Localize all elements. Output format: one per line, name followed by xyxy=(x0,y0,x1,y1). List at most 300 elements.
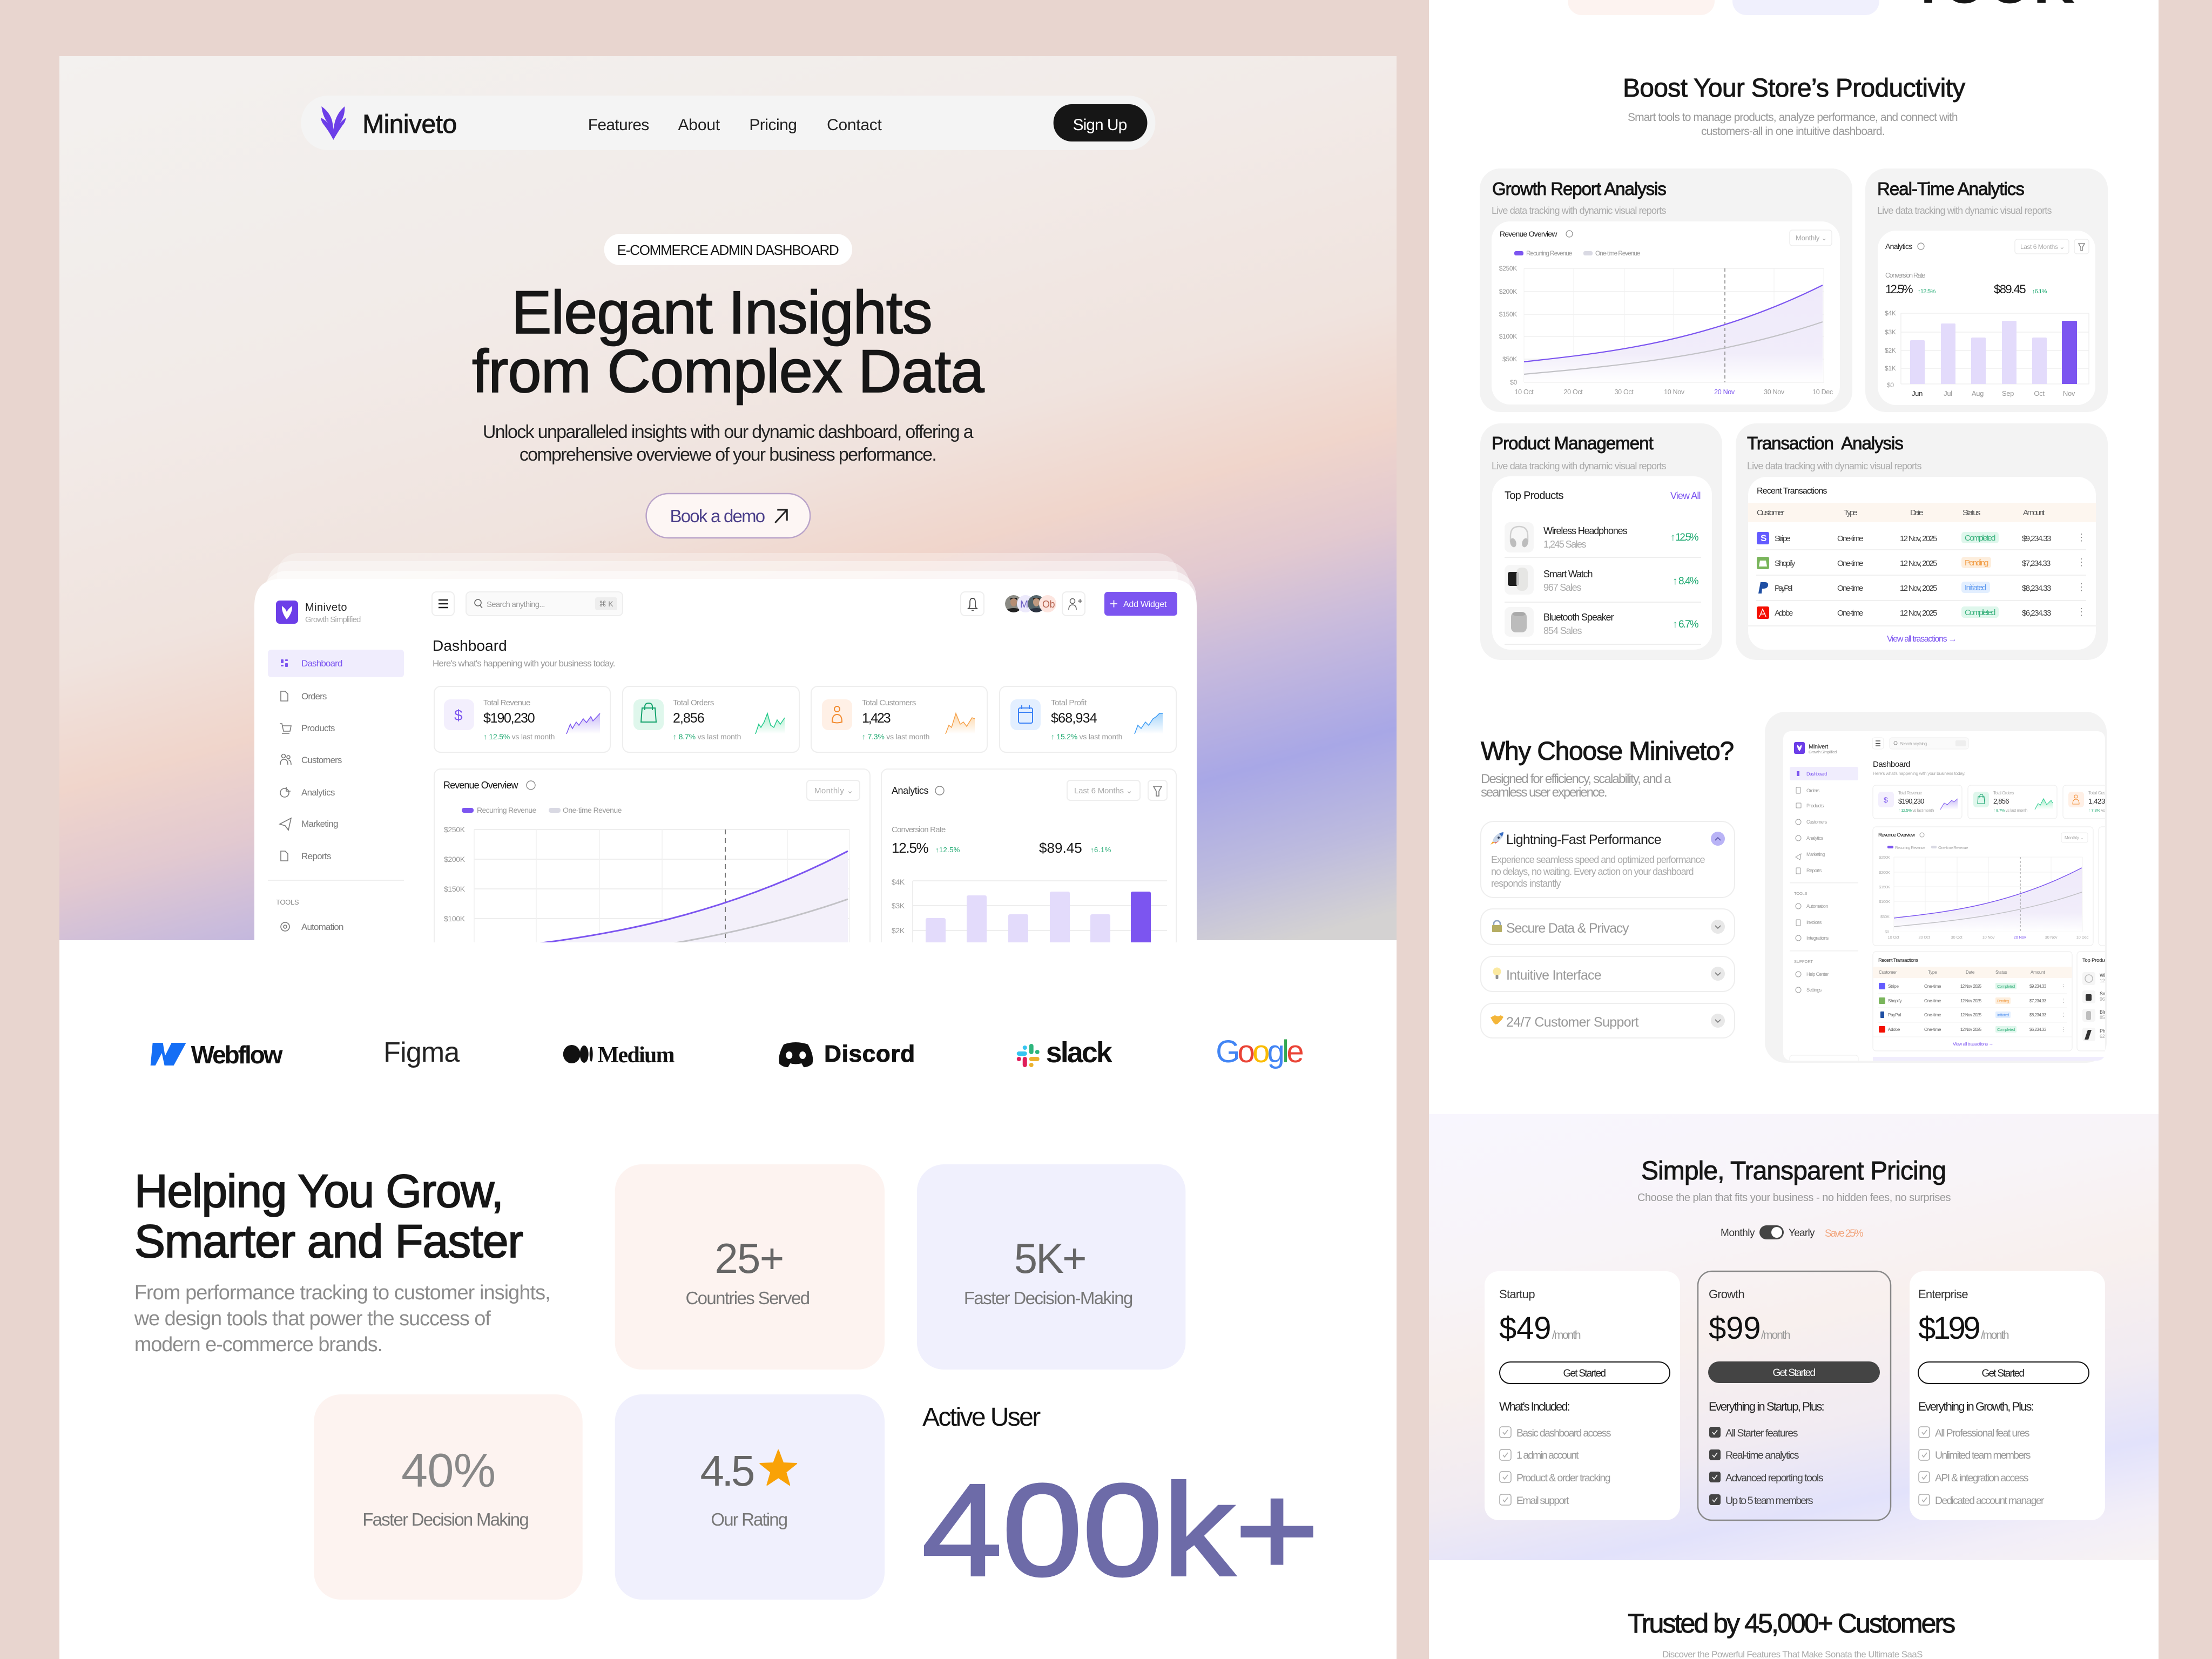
mini heading: Here's what's happening with your business today. xyxy=(1873,771,1965,776)
panel: real-time analytics: 12.5% xyxy=(1885,282,1913,296)
panel: real-time analytics: $1K xyxy=(1885,365,1896,372)
mini table: recent transactions: Recent Transactions xyxy=(1878,957,1918,963)
mini stat card: total revenue xyxy=(1873,785,1962,819)
pricing card: growth: Real-time analytics xyxy=(1725,1449,1799,1461)
top toolbar xyxy=(432,592,1177,616)
panel: growth report analysis: $150K xyxy=(1499,311,1517,318)
sidebar navigation: Marketing xyxy=(301,819,338,829)
pricing card: growth: Get Started xyxy=(1772,1367,1816,1379)
panel: growth report analysis: 10 Oct xyxy=(1515,388,1534,396)
transaction row: stripe: $9,234.33 xyxy=(2022,534,2051,543)
sidebar navigation: Orders xyxy=(301,691,327,702)
logo: Medium: Medium xyxy=(598,1043,675,1068)
mini stat card: total customers xyxy=(2063,785,2152,819)
transaction row: shopify: One-time xyxy=(1837,559,1863,568)
mini sidebar: TOOLS xyxy=(1794,891,1808,896)
mini table: recent transactions: $7,234.33 xyxy=(2029,999,2047,1003)
transaction row: paypal: 12 Nov, 2025 xyxy=(1900,584,1937,593)
pricing card: enterprise xyxy=(1910,1271,2105,1520)
stat tile: countries served: Countries Served xyxy=(685,1288,810,1308)
heading: boost your store's productivity xyxy=(1623,74,1965,138)
chart: revenue overview: One-time Revenue xyxy=(563,806,622,814)
heading: simple transparent pricing: Simple, Transparent Pricing xyxy=(1641,1157,1946,1185)
panel: growth report analysis: One-time Revenue xyxy=(1595,249,1641,257)
mini sidebar: Customers xyxy=(1806,819,1827,825)
panel: real-time analytics: Aug xyxy=(1972,389,1984,397)
top toolbar: Add Widget xyxy=(1123,600,1167,609)
chart: analytics bars: $4K xyxy=(892,878,905,886)
transaction row: stripe: 12 Nov, 2025 xyxy=(1900,534,1937,543)
stat tile: faster decision making: 40% xyxy=(401,1444,495,1497)
stat tile: faster decision-making: 5K+ xyxy=(1014,1235,1086,1282)
mini chart: revenue overview: $200K xyxy=(1879,870,1890,875)
stat card: total profit: Total Profit xyxy=(1051,698,1087,707)
mini sidebar: Invoices xyxy=(1806,920,1822,925)
mini stat card: total customers: ↑ 7.3% vs last month xyxy=(2088,808,2123,813)
mini toolbar: Search anything... xyxy=(1900,741,1930,746)
mini chart: revenue overview: 30 Nov xyxy=(2045,935,2058,940)
transaction row: adobe: Completed xyxy=(1965,608,1995,617)
transaction row: adobe: ⋮ xyxy=(2076,606,2086,617)
panel: growth report analysis: $0 xyxy=(1510,379,1518,386)
transaction row: adobe: $6,234.33 xyxy=(2022,609,2051,618)
mini list: top products: Ph xyxy=(2100,1028,2106,1034)
heading: trusted by customers: Trusted by 45,000+ Customers xyxy=(1628,1608,1955,1638)
pricing card: startup: Basic dashboard access xyxy=(1516,1427,1611,1439)
heading: helping you grow: Helping You Grow, xyxy=(134,1165,503,1217)
section subtitle xyxy=(1628,111,1958,138)
panel: real-time analytics: Sep xyxy=(2002,389,2014,397)
dashboard heading: Dashboard xyxy=(433,637,507,654)
mini table: recent transactions: Customer xyxy=(1879,970,1897,975)
panel: left page white body xyxy=(59,940,1397,1659)
panel: growth report analysis: 30 Nov xyxy=(1764,388,1785,396)
mini table: recent transactions: 12 Nov, 2025 xyxy=(1960,984,1982,989)
pricing card: startup: $49 xyxy=(1499,1311,1550,1346)
chart: analytics bars: ↑12.5% xyxy=(935,846,960,854)
mini table: recent transactions: Initiated xyxy=(1997,1013,2009,1017)
pricing card: growth: $99 xyxy=(1709,1311,1760,1346)
stat card: total revenue: $ xyxy=(454,707,463,724)
heading: helping you grow xyxy=(134,1165,523,1267)
stat card: total orders: ↑ 8.7% vs last month xyxy=(673,732,741,741)
transaction row: shopify: Pending xyxy=(1965,558,1988,568)
mini table: recent transactions: Date xyxy=(1966,970,1975,975)
pricing card: growth xyxy=(1698,1271,1891,1520)
mini table: recent transactions: Adobe xyxy=(1888,1027,1900,1032)
panel: product management: Product Management xyxy=(1492,433,1654,453)
mini table: recent transactions: Completed xyxy=(1997,1027,2015,1032)
mini list: top products: Wi xyxy=(2100,973,2105,978)
panel: real-time analytics: Analytics xyxy=(1885,242,1912,251)
mini sidebar: Products xyxy=(1806,803,1824,808)
mini chart: revenue overview: Recurring Revenue xyxy=(1895,845,1925,850)
billing toggle: Monthly xyxy=(1721,1228,1755,1239)
chart: analytics bars: $2K xyxy=(892,926,905,935)
transaction row: shopify xyxy=(1757,557,2086,569)
stat card: total revenue: $190,230 xyxy=(483,711,535,726)
chart: revenue overview: Monthly ⌄ xyxy=(814,786,853,795)
mini sidebar: Reports xyxy=(1806,868,1822,873)
subtitle: pricing: Choose the plan that fits your business - no hidden fees, no surprises xyxy=(1637,1192,1951,1204)
icon: rocket xyxy=(1491,831,1505,845)
section subtitle: Smart tools to manage products, analyze performance, and connect with xyxy=(1628,111,1958,124)
fragment: continuation of stat tiles at top of right page xyxy=(1568,0,2075,15)
mini list: top products: Blu xyxy=(2100,1009,2107,1015)
subtitle: why choose miniveto: seamless user experience. xyxy=(1481,785,1607,800)
panel: product management: Top Products xyxy=(1505,490,1564,502)
mini bottom banner xyxy=(1873,1057,2105,1063)
chart: analytics bars: ↑6.1% xyxy=(1090,846,1111,854)
mini sidebar xyxy=(1790,742,1858,1071)
mini stat card: total orders: ↑ 8.7% vs last month xyxy=(1993,808,2027,813)
panel: growth report analysis: 30 Oct xyxy=(1615,388,1634,396)
accordion: secure data and privacy xyxy=(1481,909,1735,945)
logo: Webflow xyxy=(151,1041,283,1069)
mini table: recent transactions: 12 Nov, 2025 xyxy=(1960,1013,1982,1017)
stat tile: faster decision making xyxy=(314,1394,583,1600)
sidebar logo: Miniveto xyxy=(305,602,347,613)
nav links: Contact xyxy=(827,116,882,134)
accordion: lightning-fast performance: Lightning-Fast Performance xyxy=(1506,832,1661,847)
mini table: recent transactions: Stripe xyxy=(1888,984,1899,989)
avatars xyxy=(1004,595,1056,613)
panel: growth report analysis: $250K xyxy=(1499,265,1517,272)
stat card: total profit xyxy=(1000,686,1176,752)
heading: boost your store's productivity: Boost Your Store’s Productivity xyxy=(1623,74,1965,103)
panel: real-time analytics: $0 xyxy=(1887,381,1894,389)
top toolbar: ⌘ K xyxy=(599,599,613,608)
stat tile: our rating: Our Rating xyxy=(711,1509,787,1529)
mini stat card: total orders: 2,856 xyxy=(1993,797,2009,805)
hero title xyxy=(472,279,984,405)
dashboard mockup xyxy=(254,553,1197,972)
panel: real-time analytics: ↑6.1% xyxy=(2032,288,2047,295)
panel: real-time analytics: Jun xyxy=(1912,389,1923,397)
pricing card: growth: All Starter features xyxy=(1725,1427,1798,1439)
panel: transaction analysis: Type xyxy=(1844,508,1857,517)
panel: real-time analytics: Nov xyxy=(2063,389,2075,397)
stat tile: faster decision-making xyxy=(917,1164,1185,1370)
mini list: top products: 62 xyxy=(2100,1034,2105,1039)
transaction row: adobe: Adobe xyxy=(1775,609,1793,618)
mini stat card: total customers: Total Customers xyxy=(2088,791,2118,795)
mini stat card: total orders: Total Orders xyxy=(1993,791,2014,795)
stat card: total revenue xyxy=(434,686,610,752)
chart: analytics bars xyxy=(881,768,1177,942)
mini table: recent transactions: Completed xyxy=(1997,984,2015,989)
sidebar navigation: Products xyxy=(301,723,335,733)
panel: real-time analytics xyxy=(1865,168,2108,412)
pricing card: enterprise: Unlimited team members xyxy=(1935,1449,2031,1461)
sidebar navigation: Automation xyxy=(301,922,343,932)
mini chart: revenue overview: $150K xyxy=(1879,885,1890,889)
product row: smart watch xyxy=(1505,565,1699,595)
panel: growth report analysis: $50K xyxy=(1502,355,1517,363)
heading: helping you grow: Smarter and Faster xyxy=(134,1216,523,1267)
logo: Discord: Discord xyxy=(824,1041,914,1067)
stat tile: our rating xyxy=(615,1394,885,1600)
panel: real-time analytics: $4K xyxy=(1885,309,1896,317)
mini table: recent transactions: One-time xyxy=(1924,1013,1941,1017)
mini table: recent transactions: Shopify xyxy=(1888,999,1901,1003)
button: sign up: Sign Up xyxy=(1073,116,1127,134)
mini table: recent transactions xyxy=(1873,952,2072,1051)
mini sidebar: Analytics xyxy=(1806,835,1824,841)
mini chart: revenue overview: 10 Nov xyxy=(1982,935,1995,940)
mini table: recent transactions: 12 Nov, 2025 xyxy=(1960,999,1982,1003)
panel: real-time analytics: Live data tracking with dynamic visual reports xyxy=(1877,205,2052,216)
mini table: recent transactions: $8,234.33 xyxy=(2029,1013,2047,1017)
accordion: lightning-fast performance: Experience seamless speed and optimized performance xyxy=(1491,854,1705,865)
logo: Webflow: Webflow xyxy=(191,1041,283,1069)
pricing card: startup: What’s Included: xyxy=(1499,1400,1570,1413)
paragraph: helping you grow: we design tools that power the success of xyxy=(134,1307,491,1330)
stat card: total customers xyxy=(811,686,987,752)
panel: mini dashboard preview xyxy=(1765,712,2152,1071)
logo: Medium xyxy=(563,1043,675,1068)
stat tile: faster decision-making: Faster Decision-Making xyxy=(964,1288,1132,1308)
mini stat card: total revenue: ↑ 12.5% vs last month xyxy=(1898,808,1934,813)
chart: analytics bars: $89.45 xyxy=(1039,840,1082,856)
mini sidebar: Orders xyxy=(1806,788,1820,793)
product row: wireless headphones: Wireless Headphones xyxy=(1543,525,1627,536)
paragraph: helping you grow: modern e-commerce brands. xyxy=(134,1333,382,1356)
sidebar navigation xyxy=(268,650,404,932)
logo: Figma: Figma xyxy=(383,1037,460,1068)
pricing card: enterprise: $199 xyxy=(1918,1311,1980,1346)
transaction row: stripe: S xyxy=(1761,533,1766,543)
mini chart: revenue overview: $250K xyxy=(1879,855,1890,860)
panel: real-time analytics: Last 6 Months ⌄ xyxy=(2020,243,2065,251)
mini list: top products: Sm xyxy=(2100,991,2107,996)
stat card: total revenue: Total Revenue xyxy=(483,698,530,707)
mini toolbar xyxy=(1872,738,1968,749)
transaction row: adobe xyxy=(1757,606,2086,619)
mini table: recent transactions: Pending xyxy=(1997,999,2009,1003)
transaction row: shopify: ⋮ xyxy=(2076,557,2086,568)
panel: real-time analytics: Oct xyxy=(2034,389,2045,397)
stat card: total customers: ↑ 7.3% vs last month xyxy=(862,732,929,741)
panel: transaction analysis: Live data tracking with dynamic visual reports xyxy=(1747,461,1921,471)
transaction row: stripe: One-time xyxy=(1837,534,1863,543)
mini list: top products: Top Products xyxy=(2082,957,2111,963)
mini list: top products: 85 xyxy=(2100,1015,2105,1020)
chart: analytics bars: $3K xyxy=(892,901,905,910)
panel: growth report analysis xyxy=(1480,168,1852,412)
mini list: top products xyxy=(2077,952,2131,1051)
mini table: recent transactions: One-time xyxy=(1924,999,1941,1003)
chart: revenue overview: Revenue Overview xyxy=(443,780,518,791)
sidebar navigation: Dashboard xyxy=(301,658,342,669)
mini table: recent transactions: Status xyxy=(1995,970,2007,975)
button: book a demo xyxy=(646,494,810,538)
panel: growth report analysis: Live data tracking with dynamic visual reports xyxy=(1492,205,1666,216)
stat card: total orders: 2,856 xyxy=(673,711,704,726)
mini heading: Dashboard xyxy=(1873,760,1910,769)
chart: analytics bars: 12.5% xyxy=(892,840,929,856)
panel: growth report analysis: Monthly ⌄ xyxy=(1796,234,1827,242)
mini chart: revenue overview: 20 Oct xyxy=(1919,935,1931,940)
panel: real-time analytics: $3K xyxy=(1885,328,1896,336)
mini list: top products: 96 xyxy=(2100,996,2105,1002)
mini sidebar: Integrations xyxy=(1806,935,1829,941)
mini sidebar: Automation xyxy=(1806,903,1828,909)
chart: revenue overview: $200K xyxy=(444,855,466,864)
sidebar logo xyxy=(276,601,361,624)
dashboard heading: Here's what's happening with your business today. xyxy=(433,658,615,669)
sidebar navigation: Customers xyxy=(301,755,342,765)
panel: growth report analysis: 10 Dec xyxy=(1812,388,1833,396)
chart: revenue overview: $100K xyxy=(444,914,466,923)
pricing card: enterprise: Dedicated account manager xyxy=(1935,1495,2045,1507)
product row: smart watch: 967 Sales xyxy=(1543,582,1581,593)
hero subtitle xyxy=(483,422,974,465)
mini stat card: total revenue: Total Revenue xyxy=(1898,791,1923,795)
stat: active user: 400k+ xyxy=(922,1457,1319,1603)
icon: lock xyxy=(1492,921,1502,932)
mini chart: revenue overview xyxy=(1873,827,2093,946)
chart: analytics bars: Last 6 Months ⌄ xyxy=(1074,786,1132,795)
accordion: intuitive interface xyxy=(1481,956,1735,992)
brand name: Miniveto xyxy=(362,110,456,139)
panel: growth report analysis: Revenue Overview xyxy=(1500,230,1557,238)
panel: real-time analytics: Conversion Rate xyxy=(1885,272,1925,279)
pricing card: growth: Growth xyxy=(1709,1287,1744,1301)
product row: bluetooth speaker: Bluetooth Speaker xyxy=(1543,612,1614,623)
mini list: top products: 12 xyxy=(2100,978,2105,983)
panel: transaction analysis: View all trasactions → xyxy=(1887,635,1957,644)
product row: smart watch: ↑ 8.4% xyxy=(1673,576,1699,587)
mini chart: revenue overview: 10 Oct xyxy=(1888,935,1900,940)
transaction row: shopify: 12 Nov, 2025 xyxy=(1900,559,1937,568)
sidebar navigation: TOOLS xyxy=(276,898,299,906)
nav links: Features xyxy=(588,116,649,134)
mini stat card: total customers: 1,423 xyxy=(2088,797,2105,805)
mini table: recent transactions: ⋮ xyxy=(2061,1012,2066,1017)
hero badge: E-COMMERCE ADMIN DASHBOARD xyxy=(617,242,839,258)
pricing card: startup: Product & order tracking xyxy=(1516,1472,1610,1484)
mini sidebar: Marketing xyxy=(1806,852,1825,857)
stat tile: our rating: 4.5 xyxy=(700,1447,754,1495)
pricing card: enterprise: All Professional feat ures xyxy=(1935,1427,2030,1439)
mini heading xyxy=(1873,760,1965,776)
panel: right page white body xyxy=(1429,0,2159,1659)
mini chart: revenue overview: 20 Nov xyxy=(2014,935,2026,940)
mini table: recent transactions: One-time xyxy=(1924,984,1941,989)
panel: transaction analysis: Recent Transactions xyxy=(1757,487,1827,496)
nav links xyxy=(588,116,882,134)
mini table: recent transactions: PayPal xyxy=(1888,1013,1901,1017)
panel: real-time analytics: Real-Time Analytics xyxy=(1877,179,2024,199)
pricing card: growth: Advanced reporting tools xyxy=(1725,1472,1824,1484)
transaction row: paypal xyxy=(1758,582,2086,594)
panel: product management: Live data tracking with dynamic visual reports xyxy=(1492,461,1666,471)
panel: transaction analysis: Status xyxy=(1963,508,1980,517)
logo: Slack: slack xyxy=(1046,1036,1113,1069)
transaction row: paypal: $8,234.33 xyxy=(2022,584,2051,593)
stat card: total orders: Total Orders xyxy=(673,698,714,707)
product row: wireless headphones xyxy=(1505,522,1699,552)
transaction row: shopify: Shopify xyxy=(1775,559,1796,568)
mini table: recent transactions: $9,234.33 xyxy=(2029,984,2047,989)
transaction row: stripe: Stripe xyxy=(1775,534,1790,543)
mini sidebar: Dashboard xyxy=(1806,771,1827,777)
nav links: About xyxy=(678,116,720,134)
pricing card: enterprise: /month xyxy=(1981,1329,2009,1341)
paragraph: helping you grow xyxy=(134,1282,550,1356)
panel: transaction analysis: Amount xyxy=(2023,508,2045,517)
logo: Slack xyxy=(1017,1036,1113,1069)
logo: Google: Google xyxy=(1216,1035,1303,1069)
panel: product management xyxy=(1480,423,1722,660)
dashboard heading xyxy=(433,640,615,669)
mini sidebar: SUPPORT xyxy=(1794,959,1813,964)
mini analytics card edge xyxy=(2099,827,2131,946)
avatars: Ob xyxy=(1042,599,1055,610)
heading: why choose miniveto: Why Choose Miniveto? xyxy=(1481,737,1734,766)
mini stat card: total revenue: $190,230 xyxy=(1898,797,1924,805)
navigation bar xyxy=(301,96,1155,150)
stat card: total customers: 1,423 xyxy=(862,711,891,726)
hero title: Elegant Insights xyxy=(511,279,931,346)
product row: wireless headphones: 1,245 Sales xyxy=(1543,539,1586,550)
transaction row: stripe xyxy=(1757,532,2086,544)
accordion: secure data and privacy: Secure Data & Privacy xyxy=(1506,921,1629,936)
mini chart: revenue overview: 10 Dec xyxy=(2076,935,2089,940)
transaction row: paypal: One-time xyxy=(1837,584,1863,593)
mini table: recent transactions: View all trasactions → xyxy=(1953,1041,1993,1047)
mini chart: revenue overview: Revenue Overview xyxy=(1878,832,1915,838)
stat card: total customers: Total Customers xyxy=(862,698,916,707)
hero title: from Complex Data xyxy=(472,338,984,405)
sidebar navigation: Analytics xyxy=(301,787,335,798)
button: book a demo: Book a demo xyxy=(670,506,765,526)
accordion: lightning-fast performance: no delays, no waiting. Every action on your dashboard xyxy=(1491,866,1694,877)
mini sidebar: Help Center xyxy=(1806,972,1829,977)
product row: bluetooth speaker: 854 Sales xyxy=(1543,625,1582,636)
pricing card: enterprise: Enterprise xyxy=(1918,1287,1968,1301)
stat tile: countries served xyxy=(615,1164,885,1370)
transaction row: stripe: ⋮ xyxy=(2076,532,2086,543)
subtitle: why choose miniveto: Designed for efficiency, scalability, and a xyxy=(1481,772,1671,786)
product row: bluetooth speaker xyxy=(1505,607,1699,637)
paragraph: helping you grow: From performance tracking to customer insights, xyxy=(134,1282,550,1304)
button: sign up xyxy=(1054,104,1147,141)
panel: transaction analysis: Date xyxy=(1910,508,1923,517)
stat tile: faster decision making: Faster Decision Making xyxy=(362,1509,529,1529)
pricing card: enterprise: API & integration access xyxy=(1935,1472,2029,1484)
stat tile: countries served: 25+ xyxy=(714,1235,783,1282)
transaction row: paypal: Initiated xyxy=(1965,583,1986,592)
panel: real-time analytics: $89.45 xyxy=(1994,282,2026,296)
product row: wireless headphones: ↑ 12.5% xyxy=(1670,532,1699,543)
billing toggle: Save 25% xyxy=(1825,1228,1864,1239)
transaction row: shopify: $7,234.33 xyxy=(2022,559,2051,568)
pricing card: enterprise: Everything in Growth, Plus: xyxy=(1918,1400,2034,1413)
accordion: intuitive interface: Intuitive Interface xyxy=(1506,968,1601,983)
panel: growth report analysis: 20 Oct xyxy=(1564,388,1583,396)
panel: product management: View All xyxy=(1670,490,1701,501)
pricing card: startup: Get Started xyxy=(1563,1368,1606,1379)
chart: analytics bars: Analytics xyxy=(892,785,928,796)
accordion: customer support xyxy=(1481,1003,1735,1038)
stat card: total orders xyxy=(623,686,799,752)
mini chart: revenue overview: 30 Oct xyxy=(1951,935,1963,940)
panel: transaction analysis: Transaction Analysis xyxy=(1747,433,1903,453)
panel: real-time analytics: ↑12.5% xyxy=(1918,288,1936,295)
sidebar logo: Growth Simplified xyxy=(305,615,361,624)
